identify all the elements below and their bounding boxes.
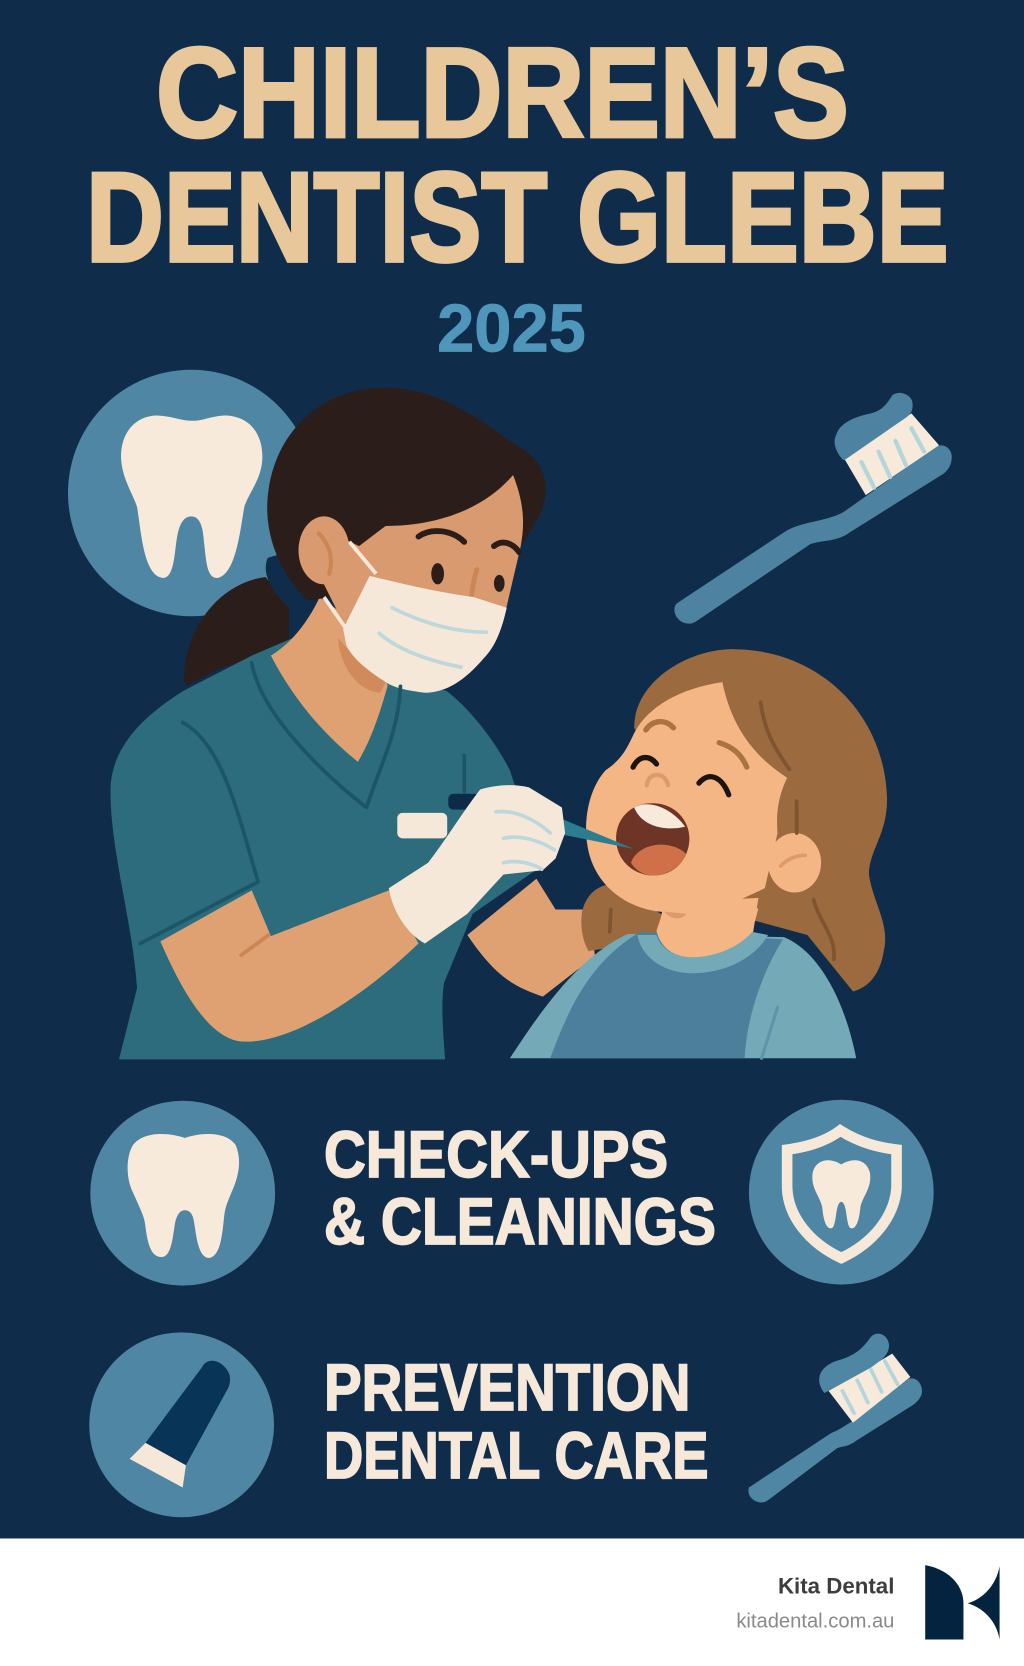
hair tie [266, 555, 310, 608]
eyes and brows [431, 563, 505, 592]
hair [267, 388, 546, 600]
badge [397, 813, 447, 838]
logo [925, 1565, 1000, 1639]
ear [768, 833, 821, 892]
icon: small toothbrush [748, 1334, 922, 1502]
forearm [160, 890, 419, 1042]
text: prevention dental care: PREVENTION [324, 1350, 690, 1424]
teeth [634, 804, 685, 828]
neck shadow [338, 638, 386, 693]
nose [472, 570, 477, 595]
face [319, 475, 523, 680]
footer brand text: Kita Dental [778, 1574, 894, 1599]
closed eyes [633, 758, 729, 795]
neck opening [656, 908, 758, 957]
year subtitle: 2025 [437, 291, 586, 367]
scrubs [110, 627, 542, 1059]
title [86, 23, 949, 289]
brows [646, 722, 747, 767]
tongue [631, 845, 686, 876]
icon: large toothbrush [674, 393, 952, 624]
hair strands [610, 702, 834, 959]
arm behind [467, 879, 595, 997]
glove [389, 785, 565, 944]
illustration: dentist [110, 388, 595, 1059]
mask [324, 542, 376, 629]
neck [271, 597, 388, 762]
footer brand text [736, 1574, 894, 1633]
nose [647, 775, 668, 785]
ear [298, 516, 349, 584]
neck [656, 898, 758, 939]
footer band [0, 1538, 1024, 1666]
ponytail [184, 577, 289, 685]
text: prevention dental care [324, 1350, 709, 1492]
face [586, 682, 787, 912]
text: prevention dental care: DENTAL CARE [324, 1418, 709, 1492]
icon: shield with tooth [749, 1100, 934, 1285]
dental instrument [552, 815, 634, 849]
pen [448, 794, 480, 810]
mouth [616, 803, 689, 876]
text: check-ups and cleanings [324, 1117, 716, 1258]
hair [634, 649, 887, 991]
icon: tooth in circle behind dentist [68, 370, 314, 616]
back hair left [581, 884, 664, 951]
title: CHILDREN’S [156, 23, 849, 165]
footer brand text: kitadental.com.au [736, 1611, 894, 1633]
scrub trim lines [140, 663, 464, 944]
illustration: child patient [510, 649, 887, 1058]
text: check-ups and cleanings: & CLEANINGS [324, 1184, 716, 1258]
text: check-ups and cleanings: CHECK-UPS [324, 1117, 668, 1191]
icon: tooth badge [90, 1101, 275, 1286]
collar [637, 932, 768, 973]
icon: dental tool badge [89, 1332, 274, 1517]
blouse [510, 934, 856, 1058]
